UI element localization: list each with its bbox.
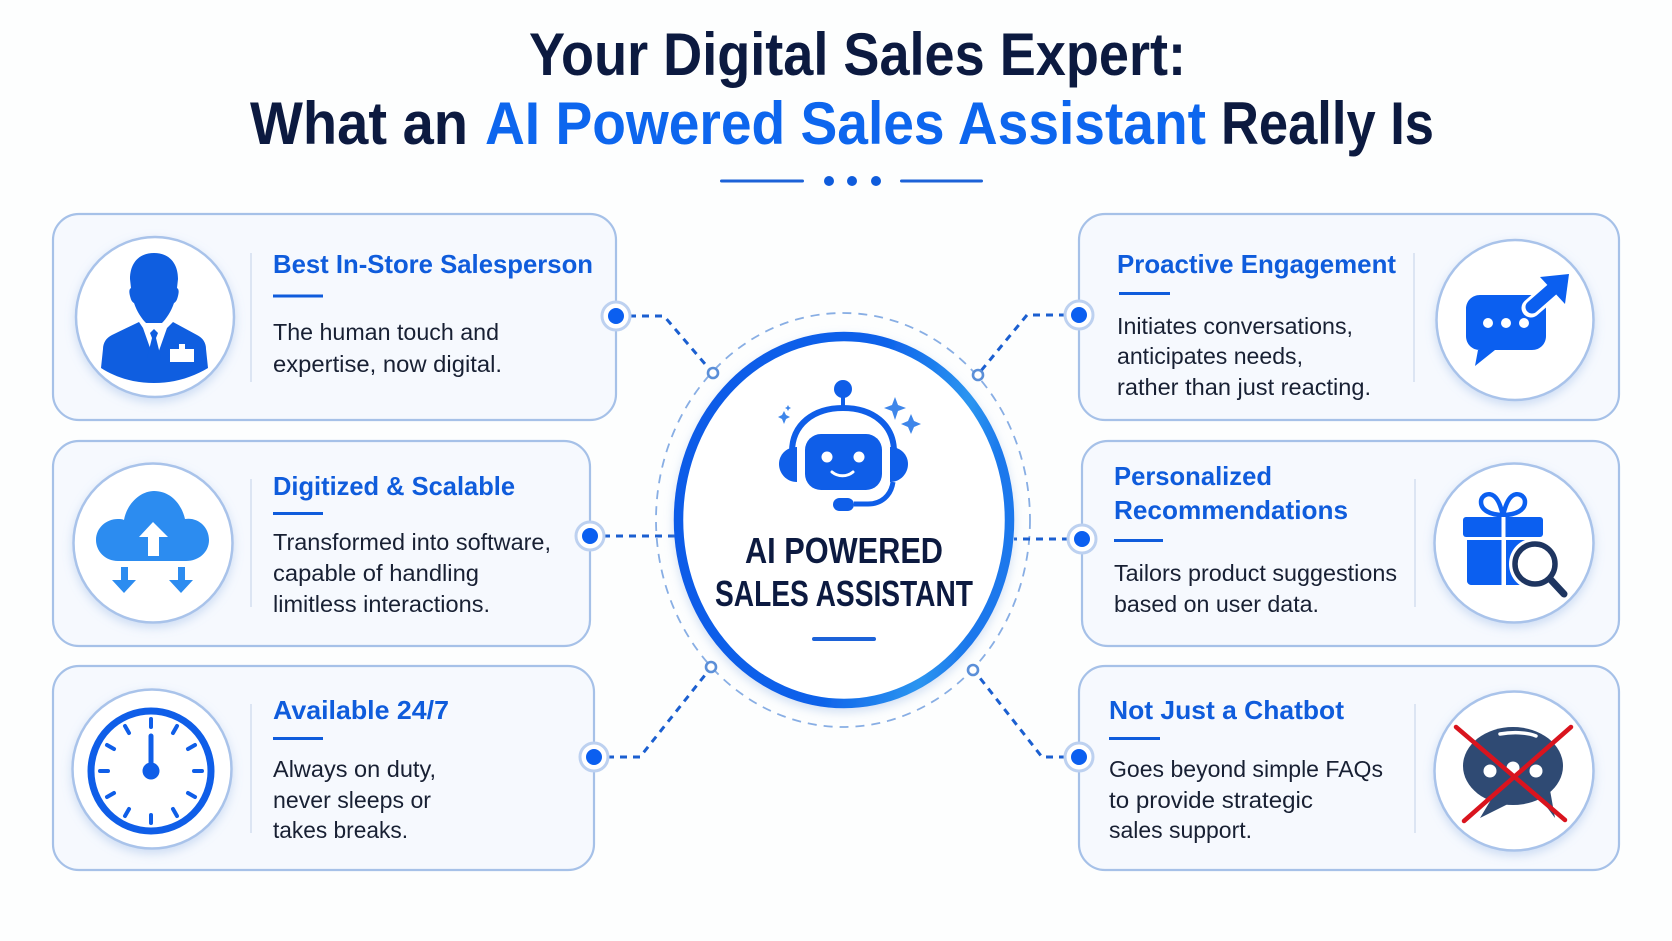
icon: robot with headset: [778, 380, 921, 511]
panel: personalized recommendations: [1082, 441, 1619, 646]
heading: Best In-Store Salesperson: [273, 249, 593, 279]
panel: digitized and scalable: [53, 441, 590, 646]
connector: bottom right: [968, 665, 1093, 771]
description: never sleeps or: [273, 787, 431, 813]
connector: bottom left: [580, 662, 716, 771]
panel: best in-store salesperson: [53, 214, 616, 420]
heading: Not Just a Chatbot: [1109, 695, 1344, 725]
description: Transformed into software,: [273, 529, 551, 555]
title: What an: [250, 90, 468, 157]
description: Goes beyond simple FAQs: [1109, 756, 1383, 782]
divider: [1413, 253, 1415, 382]
title: AI Powered Sales Assistant: [485, 90, 1206, 157]
description: The human touch and: [273, 319, 499, 345]
connector: middle left: [576, 522, 675, 550]
dashed orbit: [656, 313, 1030, 727]
description: expertise, now digital.: [273, 351, 502, 377]
description: to provide strategic: [1109, 787, 1313, 813]
description: [1109, 756, 1383, 843]
description: [273, 529, 551, 617]
icon: salesperson: [76, 237, 234, 397]
heading: [1114, 461, 1348, 525]
icon: gift with magnifier: [1434, 464, 1594, 622]
description: [273, 319, 502, 377]
divider: [250, 479, 252, 607]
heading: Proactive Engagement: [1117, 249, 1396, 279]
divider: [1414, 479, 1416, 607]
heading: Personalized: [1114, 461, 1272, 491]
description: [1114, 560, 1397, 617]
heading: Digitized & Scalable: [273, 471, 515, 501]
description: [273, 756, 436, 843]
description: Tailors product suggestions: [1114, 560, 1397, 586]
description: takes breaks.: [273, 817, 408, 843]
divider: [250, 704, 252, 833]
connector: top left: [602, 302, 718, 378]
central hub: [678, 336, 1010, 704]
connector: middle right: [1014, 525, 1096, 553]
icon: cloud: [74, 464, 232, 622]
icon: clock: [72, 690, 232, 848]
description: anticipates needs,: [1117, 343, 1303, 369]
description: sales support.: [1109, 817, 1252, 843]
connector: top right: [973, 301, 1093, 380]
title: [250, 21, 1434, 157]
hub label: SALES ASSISTANT: [715, 573, 973, 614]
description: based on user data.: [1114, 591, 1319, 617]
panel: available 24/7: [53, 666, 594, 870]
heading: Recommendations: [1114, 495, 1348, 525]
description: [1117, 313, 1371, 400]
description: Always on duty,: [273, 756, 436, 782]
hub label: [715, 530, 973, 614]
panel: not just a chatbot: [1079, 666, 1619, 870]
icon: chat with arrow: [1436, 240, 1594, 400]
description: limitless interactions.: [273, 591, 490, 617]
hub label: AI POWERED: [745, 530, 943, 571]
title divider: [720, 176, 983, 186]
description: rather than just reacting.: [1117, 374, 1371, 400]
title: Your Digital Sales Expert:: [529, 21, 1186, 88]
divider: [1414, 704, 1416, 833]
title: Really Is: [1221, 90, 1434, 157]
heading: Available 24/7: [273, 695, 449, 725]
description: capable of handling: [273, 560, 479, 586]
panel: proactive engagement: [1079, 214, 1619, 420]
divider: [250, 253, 252, 382]
icon: crossed-out chat bubble: [1434, 692, 1594, 850]
description: Initiates conversations,: [1117, 313, 1353, 339]
